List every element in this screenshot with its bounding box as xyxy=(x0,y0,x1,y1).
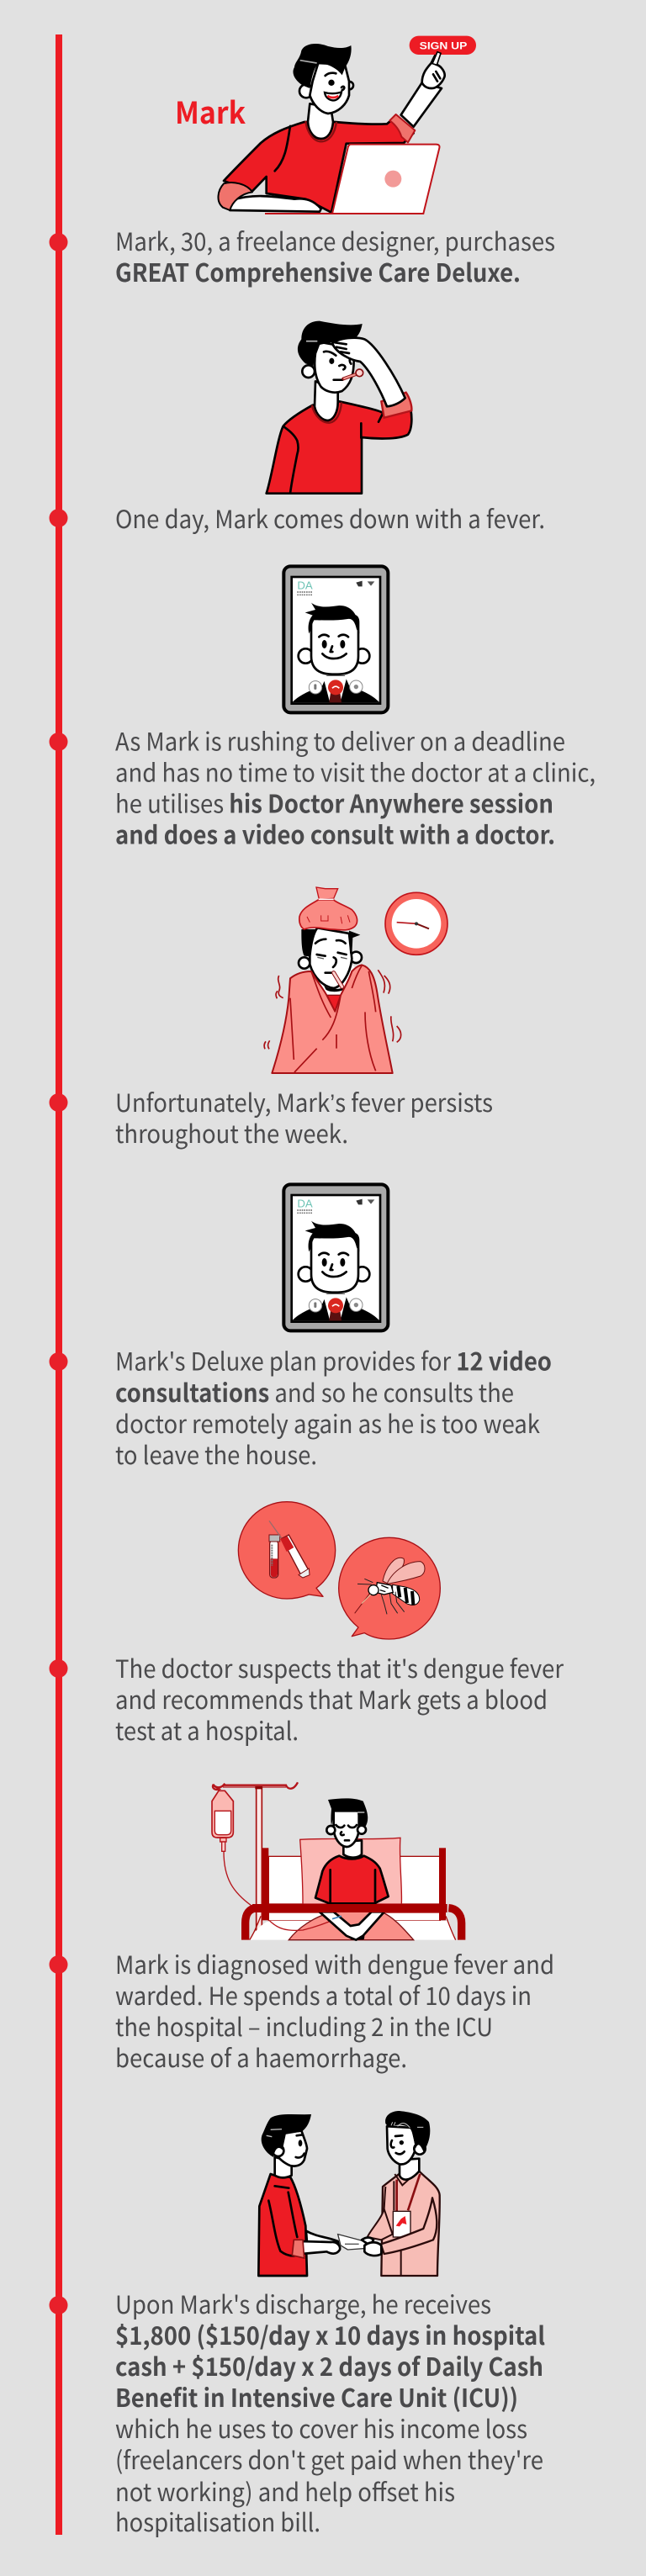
illustration: Mark in hospital bed with IV drip xyxy=(212,1782,462,1940)
illustration: tablet with doctor video call xyxy=(283,566,388,712)
text: fever persists xyxy=(115,1084,493,1150)
text: diagnosis and ward stay xyxy=(115,1946,554,2075)
illustration: Mark signing up on laptop xyxy=(218,36,476,214)
text: fever persists: Unfortunately, Mark’s fever persists xyxy=(115,1084,493,1119)
text: 12 video consultations: to leave the house. xyxy=(115,1436,317,1472)
text: purchase: Mark, 30, a freelance designer, purchases xyxy=(115,223,555,258)
name label: Mark: Mark xyxy=(175,89,246,133)
text: 12 video consultations: Mark's Deluxe plan provides for 12 video xyxy=(115,1342,552,1378)
text: diagnosis and ward stay: the hospital – including 2 in the ICU xyxy=(115,2008,493,2044)
illustration: tablet with second video consult: DA xyxy=(297,1198,313,1210)
text: doctor anywhere paragraph: As Mark is rushing to deliver on a deadline xyxy=(115,723,565,759)
timeline line with dots xyxy=(49,34,67,2535)
text: suspected dengue: test at a hospital. xyxy=(115,1712,299,1748)
illustration: Mark signing up on laptop: SIGN UP xyxy=(420,40,467,52)
text: $1,800 payout paragraph: (freelancers don't get paid when they're xyxy=(115,2441,543,2477)
text: diagnosis and ward stay: Mark is diagnosed with dengue fever and xyxy=(115,1946,554,1981)
illustration: tablet with second video consult xyxy=(283,1184,388,1330)
illustration: tablet with doctor video call: DA xyxy=(297,579,313,592)
illustration: Mark with fever xyxy=(267,321,411,494)
text: plan name: GREAT Comprehensive Care Deluxe. xyxy=(115,254,521,289)
text: suspected dengue: and recommends that Mark gets a blood xyxy=(115,1681,548,1716)
text: suspected dengue xyxy=(115,1650,564,1748)
text: 12 video consultations: consultations and so he consults the xyxy=(115,1374,514,1410)
text: 12 video consultations xyxy=(115,1342,552,1472)
illustration: speech bubbles with blood test and mosquito xyxy=(238,1502,440,1639)
text: $1,800 payout paragraph: hospitalisation bill. xyxy=(115,2504,320,2539)
illustration: Mark in blanket with ice bag and clock xyxy=(264,887,447,1073)
text: doctor anywhere paragraph: he utilises his Doctor Anywhere session xyxy=(115,785,553,821)
text: $1,800 payout paragraph: $1,800 ($150/day x 10 days in hospital xyxy=(115,2317,545,2352)
text: $1,800 payout paragraph: not working) and help offset his xyxy=(115,2473,455,2509)
text: fever: One day, Mark comes down with a fever. xyxy=(115,500,545,536)
text: 12 video consultations: doctor remotely again as he is too weak xyxy=(115,1405,540,1441)
text: diagnosis and ward stay: warded. He spends a total of 10 days in xyxy=(115,1977,532,2013)
text: diagnosis and ward stay: because of a haemorrhage. xyxy=(115,2039,407,2075)
text: doctor anywhere paragraph: and has no time to visit the doctor at a clinic, xyxy=(115,754,596,789)
illustration: Mark receiving cash from agent xyxy=(258,2111,440,2276)
text: doctor anywhere paragraph: and does a video consult with a doctor. xyxy=(115,816,555,851)
text: fever persists: throughout the week. xyxy=(115,1115,348,1150)
text: $1,800 payout paragraph: Upon Mark's discharge, he receives xyxy=(115,2286,491,2321)
text: $1,800 payout paragraph: Benefit in Intensive Care Unit (ICU)) xyxy=(115,2379,518,2415)
text: $1,800 payout paragraph: cash + $150/day x 2 days of Daily Cash xyxy=(115,2348,543,2383)
text: suspected dengue: The doctor suspects that it's dengue fever xyxy=(115,1650,564,1685)
text: doctor anywhere paragraph xyxy=(115,723,596,851)
text: $1,800 payout paragraph xyxy=(115,2286,545,2539)
text: $1,800 payout paragraph: which he uses to cover his income loss xyxy=(115,2410,527,2446)
